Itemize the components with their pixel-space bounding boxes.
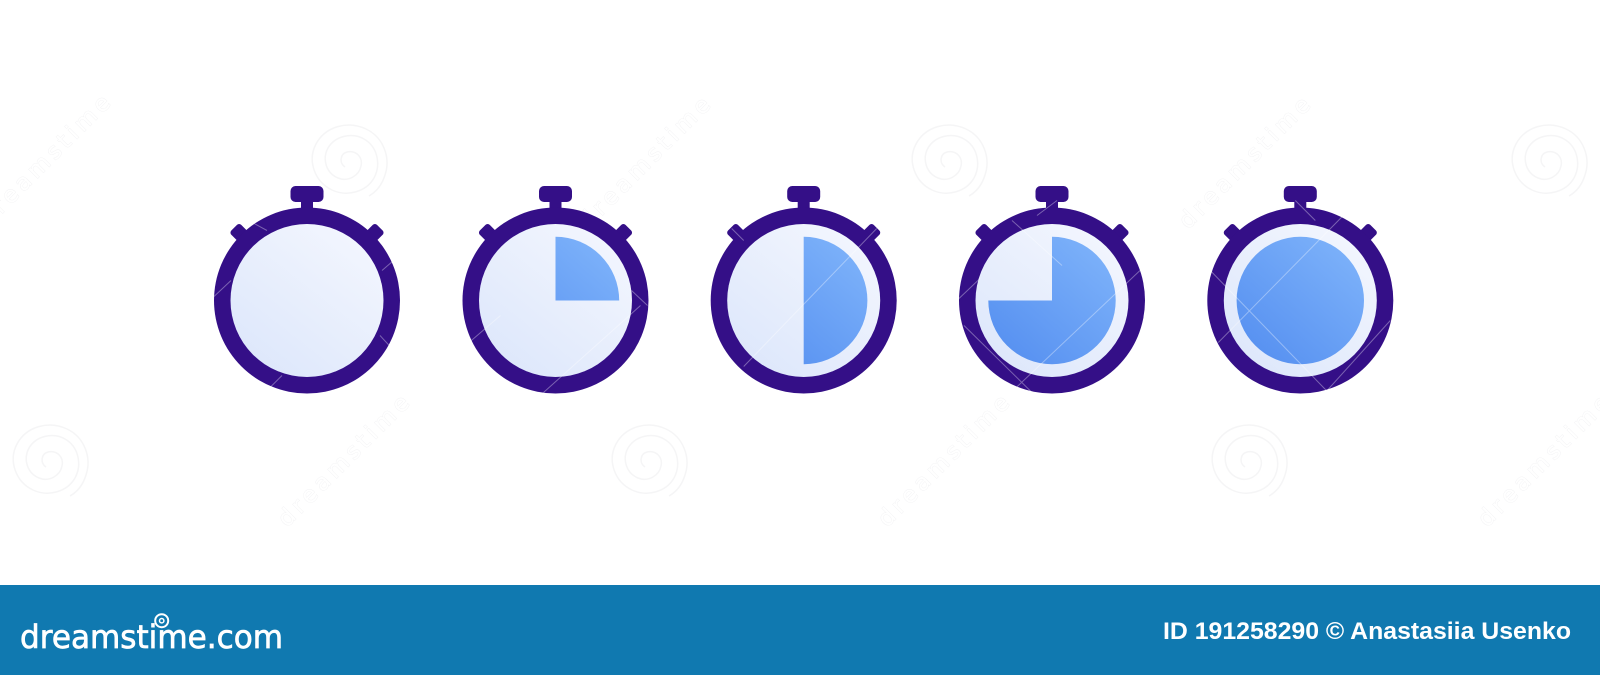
stopwatch 1: empty (214, 186, 400, 394)
stopwatch 3: half filled (711, 186, 897, 394)
footer banner (0, 585, 1600, 675)
stopwatch 2: quarter filled (462, 186, 648, 394)
stopwatch 5: fully filled (1207, 186, 1393, 394)
watermark: faint spirals and dreamstime text: dreamstime (273, 390, 415, 532)
image ID and author credit: ID 191258290 © Anastasiia Usenko (1163, 618, 1571, 645)
watermark: faint spirals and dreamstime text (0, 90, 1600, 532)
stopwatch 4: three quarters filled (959, 186, 1145, 394)
watermark: faint spirals and dreamstime text: dreamstime (873, 390, 1015, 532)
watermark: faint spirals and dreamstime text: dreamstime (574, 92, 716, 234)
watermark: faint spirals and dreamstime text: dreamstime (1174, 92, 1316, 234)
dreamstime logo: dreamstime.com (20, 618, 283, 656)
